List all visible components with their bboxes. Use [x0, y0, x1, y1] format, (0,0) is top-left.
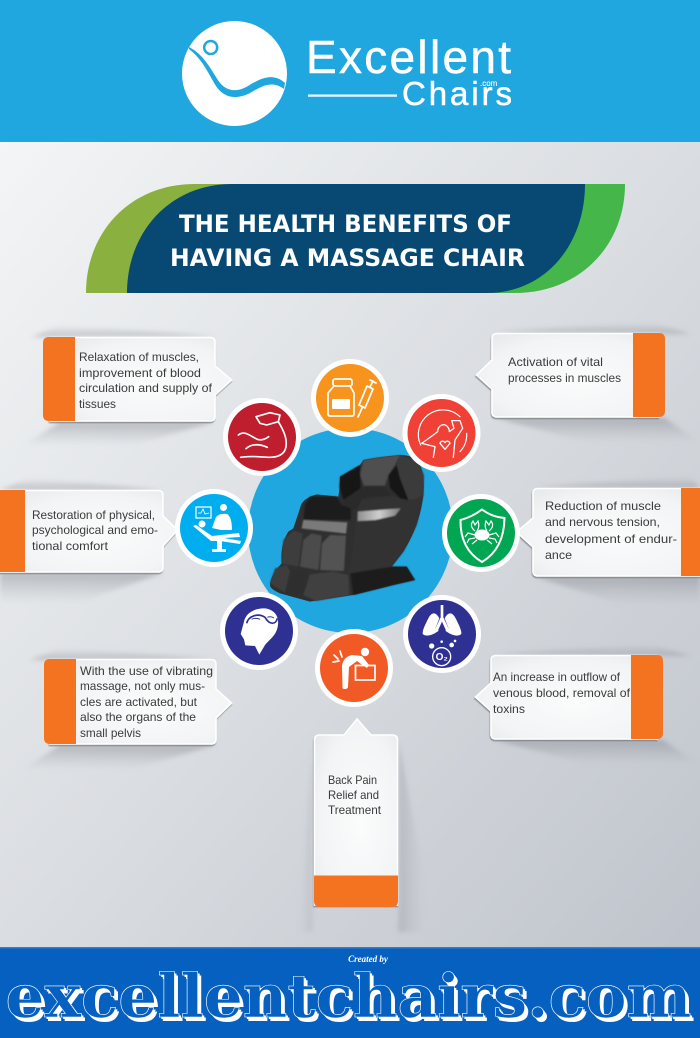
central blue circle: [248, 428, 453, 633]
created by: Created by: [348, 954, 389, 964]
card: relaxation of muscles: Relaxation of muscles,: [79, 350, 199, 364]
card: activation of vital processes: Activation of vital: [508, 355, 603, 369]
card: back pain relief: Back Pain: [328, 773, 377, 787]
icon: strong body with heart: [402, 394, 480, 472]
logo wordmark: Chairs: [402, 75, 512, 112]
logo wordmark: .com: [480, 79, 498, 88]
website address: excellentchairs.com: [8, 964, 694, 1034]
card: relaxation of muscles: circulation and supply of: [79, 381, 213, 395]
card: venous blood outflow: [476, 655, 663, 739]
card: reduction of tension: ance: [545, 548, 572, 562]
card: reduction of tension: and nervous tension,: [545, 515, 660, 529]
icon: flexed muscle: [223, 398, 301, 476]
card: vibrating massage: cles are activated, but: [80, 695, 198, 709]
card shadows: [0, 322, 700, 932]
card: back pain relief: Relief and: [328, 788, 379, 802]
background: [0, 142, 700, 948]
card: reduction of tension: Reduction of muscle: [545, 499, 661, 513]
card: vibrating massage: massage, not only mus-: [80, 679, 205, 693]
title text: [170, 210, 525, 272]
card: relaxation of muscles: [43, 337, 232, 421]
logo wordmark: [306, 31, 512, 112]
card: venous blood outflow: venous blood, removal of: [493, 686, 631, 700]
icon: back pain lifting box: [315, 629, 393, 707]
card: venous blood outflow: An increase in outflow of: [493, 670, 621, 684]
website address: excellentchairs.com: [6, 962, 692, 1032]
footer band: [0, 947, 700, 1038]
card: restoration of comfort: psychological and emo-: [32, 523, 158, 537]
card: relaxation of muscles: improvement of blood: [79, 366, 201, 380]
card: back pain relief: Treatment: [328, 803, 382, 817]
card: restoration of comfort: [0, 490, 178, 572]
card: activation of vital processes: processes in muscles: [508, 371, 621, 385]
title text: THE HEALTH BENEFITS OF: [179, 210, 512, 238]
icon: crab shield: [442, 494, 520, 572]
card: restoration of comfort: tional comfort: [32, 539, 109, 553]
icon: medical patient care: [175, 489, 253, 567]
title banner: [86, 184, 625, 293]
card: venous blood outflow: toxins: [493, 702, 525, 716]
logo wordmark: Excellent: [306, 31, 511, 83]
card: vibrating massage: [44, 659, 232, 744]
logo mark: [182, 21, 287, 126]
card: reduction of tension: [516, 488, 700, 576]
icon: lungs with oxygen: O₂: [436, 652, 448, 663]
card: reduction of tension: development of endur-: [545, 532, 677, 546]
icon: lungs with oxygen: [403, 595, 481, 673]
card: vibrating massage: small pelvis: [80, 726, 141, 740]
massage chair: [270, 455, 424, 602]
card: restoration of comfort: Restoration of physical,: [32, 508, 155, 522]
card: vibrating massage: With the use of vibrating: [80, 664, 213, 678]
card: activation of vital processes: [476, 333, 665, 417]
title text: HAVING A MASSAGE CHAIR: [170, 244, 525, 272]
website address: excellentchairs.com: [9, 966, 695, 1036]
card: relaxation of muscles: tissues: [79, 397, 116, 411]
icon: medicine bottle and syringe: [311, 359, 389, 437]
icon: head with brain: [220, 592, 298, 670]
header band: [0, 0, 700, 142]
card: vibrating massage: also the organs of the: [80, 710, 196, 724]
card: back pain relief: [314, 719, 398, 907]
